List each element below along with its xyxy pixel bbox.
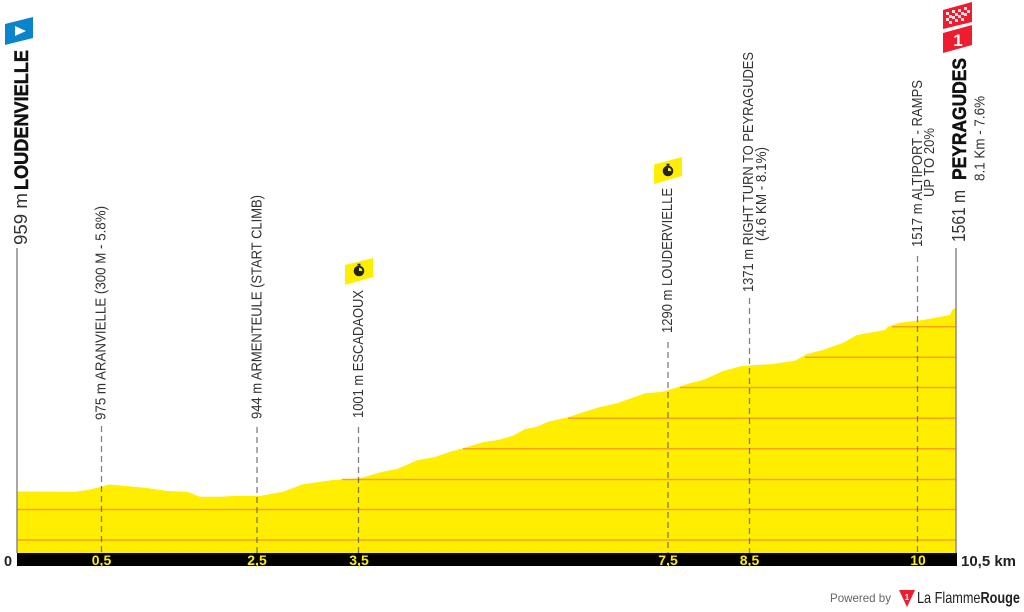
distance axis labels: 0,5 [92,552,111,568]
distance axis bar [17,553,957,566]
intermediate sprint icon: Escadaoux [345,258,373,285]
start label [11,50,33,245]
waypoint label: Altiport: UP TO 20% [922,128,938,197]
waypoint label: Aranvielle: 975 m ARANVIELLE (300 M - 5.8%) [94,206,110,420]
waypoint label: Altiport: 1517 m ALTIPORT - RAMPS [910,80,926,247]
waypoint label: right turn to Peyragudes [741,52,770,292]
axis start label: 0 [4,554,12,570]
elevation profile area [17,308,956,553]
axis end label: 10,5 km [961,554,1016,570]
finish icon [943,2,972,53]
climb stats: 8.1 Km - 7.6% [972,96,988,181]
powered by credit: Powered by [830,591,891,605]
distance axis labels [92,552,926,568]
distance axis labels: 10 [910,552,926,568]
start icon [5,17,33,45]
waypoint label: Altiport [910,80,938,247]
waypoint label: Loudervielle: 1290 m LOUDERVIELLE [660,188,676,333]
distance axis labels: 7,5 [658,552,678,568]
waypoint label: Escadaoux: 1001 m ESCADAOUX [351,290,367,418]
intermediate sprint icon: Loudervielle [654,157,682,184]
waypoint label: right turn to Peyragudes: (4.6 KM - 8.1%) [754,147,770,241]
start label: LOUDENVIELLE [11,50,33,190]
waypoint label: Armenteule: 944 m ARMENTEULE (START CLIMB) [250,195,266,419]
finish label [949,58,971,242]
start label: 959 m [11,193,31,245]
waypoint label: right turn to Peyragudes: 1371 m RIGHT TURN TO PEYRAGUDES [741,52,757,292]
distance axis labels: 8,5 [740,552,759,568]
start and finish elevation lines [17,248,956,553]
finish icon: 1 [953,31,963,50]
distance axis labels: 3,5 [349,552,369,568]
logo: La Flamme Rouge: 1 [905,593,910,602]
distance axis labels: 2,5 [247,552,267,568]
finish label: 1561 m [949,190,969,242]
dashed waypoint lines [102,256,918,553]
finish label: PEYRAGUDES [949,58,971,180]
gradient grid lines [17,327,956,540]
